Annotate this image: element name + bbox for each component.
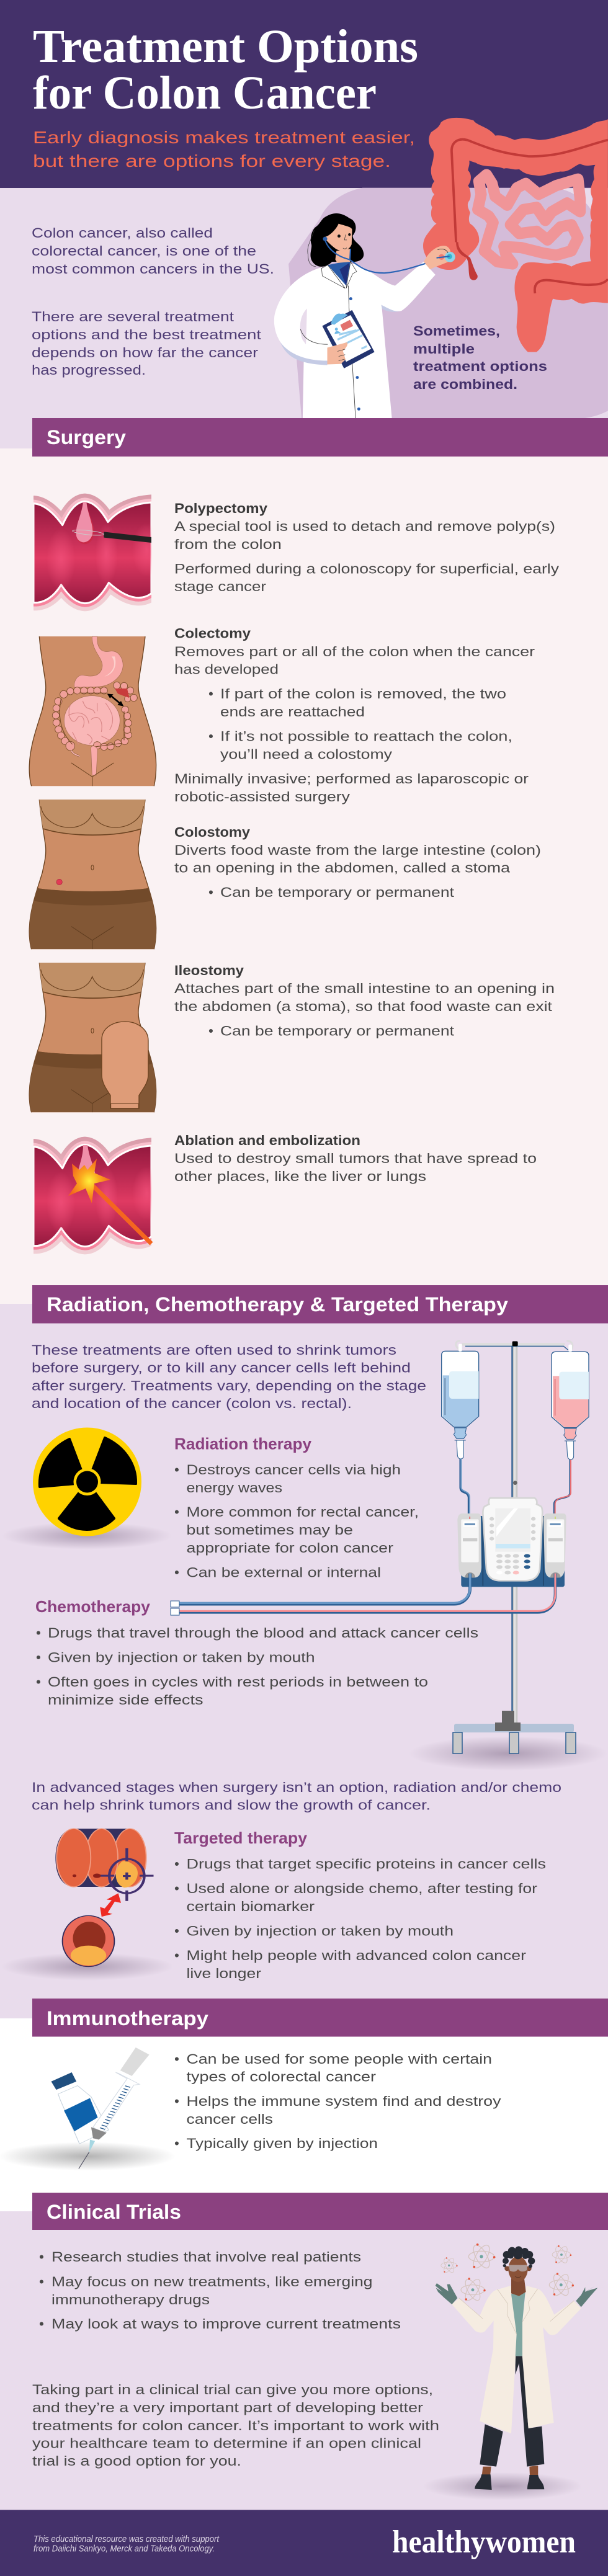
text: targeted therapy: • [174,1923,179,1939]
heading: immunotherapy [32,1999,608,2037]
text: chemotherapy: • [36,1625,41,1641]
text: colostomy: Can be temporary or permanent [220,885,455,900]
left module [457,1513,481,1577]
text: colostomy: to an opening in the abdomen, called a stoma [174,860,511,876]
logo: healthywomen: healthywomen [392,2525,576,2560]
small intestine [478,175,580,264]
text block: intro: most common cancers in the US. [32,261,274,277]
text: chemotherapy: Chemotherapy [35,1597,151,1616]
text: clinical trial bullets: • [39,2274,44,2289]
text: clinical trial bullets: Research studies that involve real patients [51,2249,361,2265]
text: treatments intro: and location of the cancer (colon vs. rectal). [32,1396,352,1411]
callout: are combined. [413,377,517,392]
text: targeted therapy: • [174,1948,179,1963]
tubes [171,1574,470,1604]
text: treatments intro [32,1342,426,1411]
text block: intro: There are several treatment [32,309,235,324]
pump [171,1498,566,1612]
icon: abdomen with colectomy [29,636,156,786]
text block: intro [32,225,274,378]
text: ablation: other places, like the liver or lungs [174,1169,426,1184]
subtitle: but there are options for every stage. [33,151,391,171]
icon: abdomen with colostomy [27,800,159,951]
heading: surgery: Surgery [47,426,126,448]
panel: radiation, chemotherapy and targeted therapy [1,1285,608,1981]
gloves [436,2283,457,2304]
text: immunotherapy: Helps the immune system find and destroy [186,2093,501,2109]
sponsor note: This educational resource was created with support [34,2534,220,2544]
sponsor note: from Daiichi Sankyo, Merck and Takeda Oncology. [34,2543,215,2554]
text: ablation: Used to destroy small tumors that have spread to [174,1151,537,1166]
text: ileostomy: Ileostomy [174,963,244,978]
text: clinical trial paragraph [32,2382,439,2469]
text: radiation therapy: energy waves [186,1480,282,1495]
text: treatments intro: after surgery. Treatments vary, depending on the stage [32,1378,426,1393]
panel: header [0,0,608,188]
hair [310,213,364,267]
text: targeted therapy: • [174,1856,179,1872]
title: for Colon Cancer [33,67,377,119]
text: radiation therapy: Radiation therapy [174,1434,312,1453]
heading: surgery [32,418,608,457]
text: colectomy: • [208,728,213,744]
heading: radiation chemotherapy targeted therapy: Radiation, Chemotherapy & Targeted Therapy [47,1293,508,1316]
face [325,224,352,251]
text: targeted therapy: Used alone or alongside chemo, after testing for [186,1881,538,1896]
text: clinical trial bullets: • [39,2316,44,2332]
text: targeted therapy: • [174,1881,179,1896]
text block: intro: Colon cancer, also called [32,225,213,241]
text: colectomy: has developed [174,661,279,677]
text: ileostomy [174,963,555,1038]
text: targeted therapy: certain biomarker [186,1899,315,1914]
heading: clinical trials [32,2193,608,2230]
icon: abdomen with ileostomy pouch [27,963,159,1114]
text block: intro: has progressed. [32,362,146,378]
IV stand and bags [442,1341,589,1734]
text: immunotherapy: Typically given by injection [186,2136,378,2151]
text: chemotherapy [35,1597,478,1708]
text: immunotherapy: • [174,2093,179,2109]
text: targeted therapy: Given by injection or taken by mouth [186,1923,454,1939]
text: clinical trial paragraph: your healthcare team to determine if an open clinical [32,2435,421,2451]
text: colostomy: • [208,885,213,900]
panel: clinical trials [32,2193,608,2500]
text: radiation therapy: • [174,1504,179,1520]
text: colectomy: you’ll need a colostomy [220,747,393,762]
text: targeted therapy [174,1829,546,1981]
text: immunotherapy: cancer cells [186,2111,273,2127]
text: polypectomy: stage cancer [174,579,267,594]
text: advanced stages: can help shrink tumors and slow the growth of cancer. [32,1798,431,1812]
blue bag [442,1351,479,1427]
text: colectomy: If it’s not possible to reattach the colon, [220,728,512,744]
text: immunotherapy: Can be used for some people with certain [186,2051,492,2067]
callout [413,323,547,392]
text: radiation therapy: More common for rectal cancer, [186,1504,419,1520]
heading: immunotherapy: Immunotherapy [47,2007,208,2030]
text: polypectomy: Performed during a colonoscopy for superficial, early [174,561,560,577]
text: clinical trial paragraph: trial is a good option for you. [32,2453,241,2469]
text: immunotherapy [174,2051,501,2151]
callout: multiple [413,341,475,357]
subtitle: Early diagnosis makes treatment easier, [33,128,415,147]
coat [452,2286,517,2433]
text: polypectomy: A special tool is used to detach and remove polyp(s) [174,519,555,534]
text: radiation therapy: • [174,1462,179,1477]
panel: surgery [27,418,608,1247]
icon: radiation symbol [2,1428,172,1549]
clipboard [322,310,375,368]
text: ileostomy: the abdomen (a stoma), so that food waste can exit [174,999,553,1014]
text: treatments intro: before surgery, or to kill any cancer cells left behind [32,1360,411,1376]
text: immunotherapy: • [174,2136,179,2151]
text: colostomy: Colostomy [174,824,251,840]
panel: immunotherapy [0,1999,608,2171]
text: colectomy: Colectomy [174,625,251,641]
right module [543,1513,566,1577]
text: ileostomy: Can be temporary or permanent [220,1023,455,1038]
legs [516,2356,544,2467]
text: polypectomy [174,501,560,594]
text: clinical trial paragraph: Taking part in a clinical trial can give you more options, [32,2382,433,2397]
text: clinical trial paragraph: treatments for colon cancer. It’s important to work with [32,2418,439,2433]
head [504,2266,509,2271]
stand base [454,1724,574,1732]
text: treatments intro: These treatments are often used to shrink tumors [32,1342,396,1358]
icon: polypectomy tunnel [34,501,161,604]
text: chemotherapy: Given by injection or taken by mouth [48,1650,315,1665]
text: immunotherapy: types of colorectal cancer [186,2069,377,2084]
text: radiation therapy: • [174,1564,179,1580]
icon: scientist with atoms [423,2243,597,2500]
icon: targeted therapy colon with crosshair [1,1829,173,1981]
icon: ablation tunnel with laser [34,1144,161,1247]
text: ablation [174,1133,537,1184]
text: radiation therapy: appropriate for colon cancer [186,1540,394,1556]
text block: intro: options and the best treatment [32,327,262,342]
text: chemotherapy: minimize side effects [48,1692,203,1708]
text: chemotherapy: • [36,1650,41,1665]
text: immunotherapy: • [174,2051,179,2067]
text: radiation therapy: but sometimes may be [186,1522,353,1538]
text: clinical trial paragraph: and they’re a very important part of developing better [32,2400,424,2415]
text: radiation therapy: Can be external or internal [186,1564,381,1580]
subtitle [33,128,415,171]
text: chemotherapy: Often goes in cycles with rest periods in between to [48,1674,428,1690]
sponsor note [34,2534,220,2554]
text: clinical trial bullets: May focus on new treatments, like emerging [51,2274,372,2289]
text: colectomy [174,625,535,804]
heading: radiation chemotherapy targeted therapy [32,1285,608,1324]
stethoscope [323,237,327,241]
shirt and neck [511,2292,525,2356]
atoms [468,2243,495,2270]
text block: intro: colorectal cancer, is one of the [32,243,256,259]
text: polypectomy: from the colon [174,537,282,552]
text: colectomy: Minimally invasive; performed as laparoscopic or [174,771,529,787]
text: targeted therapy: Drugs that target specific proteins in cancer cells [186,1856,546,1872]
text: ablation: Ablation and embolization [174,1133,360,1148]
callout: Sometimes, [413,323,500,339]
illustration background blob [288,188,608,418]
callout: treatment options [413,359,547,374]
icon: colon and intestines [423,118,608,352]
text: polypectomy: Polypectomy [174,501,268,516]
text: chemotherapy: Drugs that travel through the blood and attack cancer cells [48,1625,478,1641]
text: ileostomy: Attaches part of the small intestine to an opening in [174,981,555,996]
text: colectomy: ends are reattached [220,704,365,720]
text: clinical trial bullets: May look at ways to improve current treatments [51,2316,401,2332]
text: advanced stages [32,1780,561,1812]
text: targeted therapy: Targeted therapy [174,1829,308,1847]
pink bag [552,1352,589,1428]
text: colostomy [174,824,541,900]
text: colostomy: Diverts food waste from the large intestine (colon) [174,842,541,858]
panel: footer [0,2510,608,2576]
text: advanced stages: In advanced stages when surgery isn’t an option, radiation and/or chemo [32,1780,561,1795]
heading: clinical trials: Clinical Trials [47,2201,181,2223]
text: ileostomy: • [208,1023,213,1038]
icon: IV drip stand and pump [171,1341,607,1771]
coat [274,262,436,418]
text: colectomy: robotic-assisted surgery [174,789,351,804]
chemo line connectors [171,1601,179,1607]
text: colectomy: • [208,686,213,702]
text: targeted therapy: Might help people with advanced colon cancer [186,1948,527,1963]
text: targeted therapy: live longer [186,1966,262,1981]
text: colectomy: If part of the colon is removed, the two [220,686,506,702]
text: clinical trial bullets: immunotherapy drugs [51,2292,210,2307]
title [33,20,418,119]
neck and shirt [335,249,351,269]
text block: intro: depends on how far the cancer [32,345,259,360]
icon: vial and syringe [0,2048,176,2171]
text: chemotherapy: • [36,1674,41,1690]
text: colectomy: Removes part or all of the colon when the cancer [174,644,535,659]
hand [424,246,450,269]
text: radiation therapy [174,1434,419,1580]
large intestine [423,118,608,352]
icon: doctor with stethoscope [274,213,455,418]
text: clinical trial bullets: • [39,2249,44,2265]
text: radiation therapy: Destroys cancer cells via high [186,1462,401,1477]
text: clinical trial bullets [39,2249,401,2332]
title: Treatment Options [33,20,418,73]
